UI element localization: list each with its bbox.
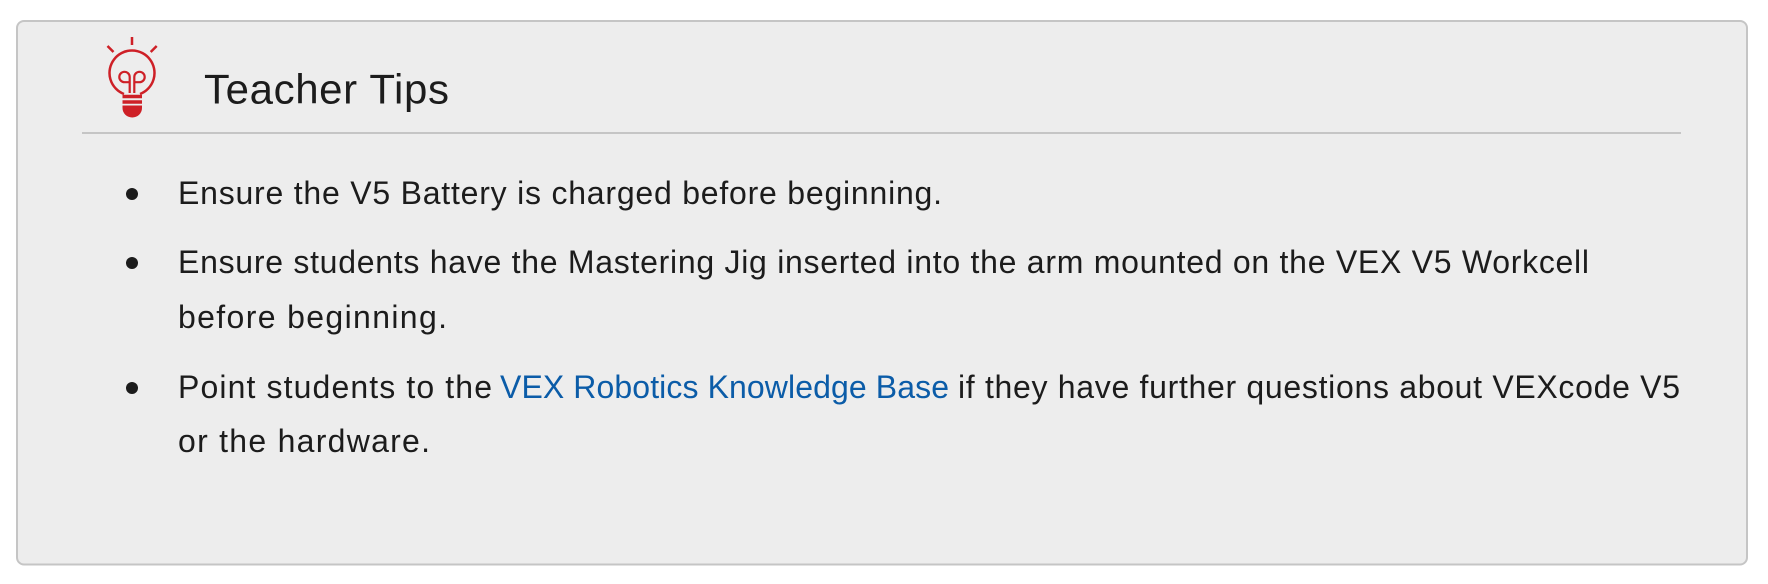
tip 2 <box>126 244 1589 335</box>
tip 2: Ensure students have the Mastering Jig inserted into the arm mounted on the VEX V5 Workcell <box>178 244 1589 280</box>
tip 1: Ensure the V5 Battery is charged before beginning. <box>178 175 942 211</box>
tip 3 <box>126 369 1680 459</box>
tip 3: or the hardware. <box>178 423 430 459</box>
icon: light bulb <box>108 37 157 118</box>
link: knowledge base: VEX Robotics Knowledge Base <box>500 369 949 405</box>
tip 3: if they have further questions about VEXcode V5 <box>958 369 1680 405</box>
tip 3: Point students to the <box>178 369 492 405</box>
heading: Teacher Tips <box>204 66 449 112</box>
tip 2: before beginning. <box>178 299 447 335</box>
